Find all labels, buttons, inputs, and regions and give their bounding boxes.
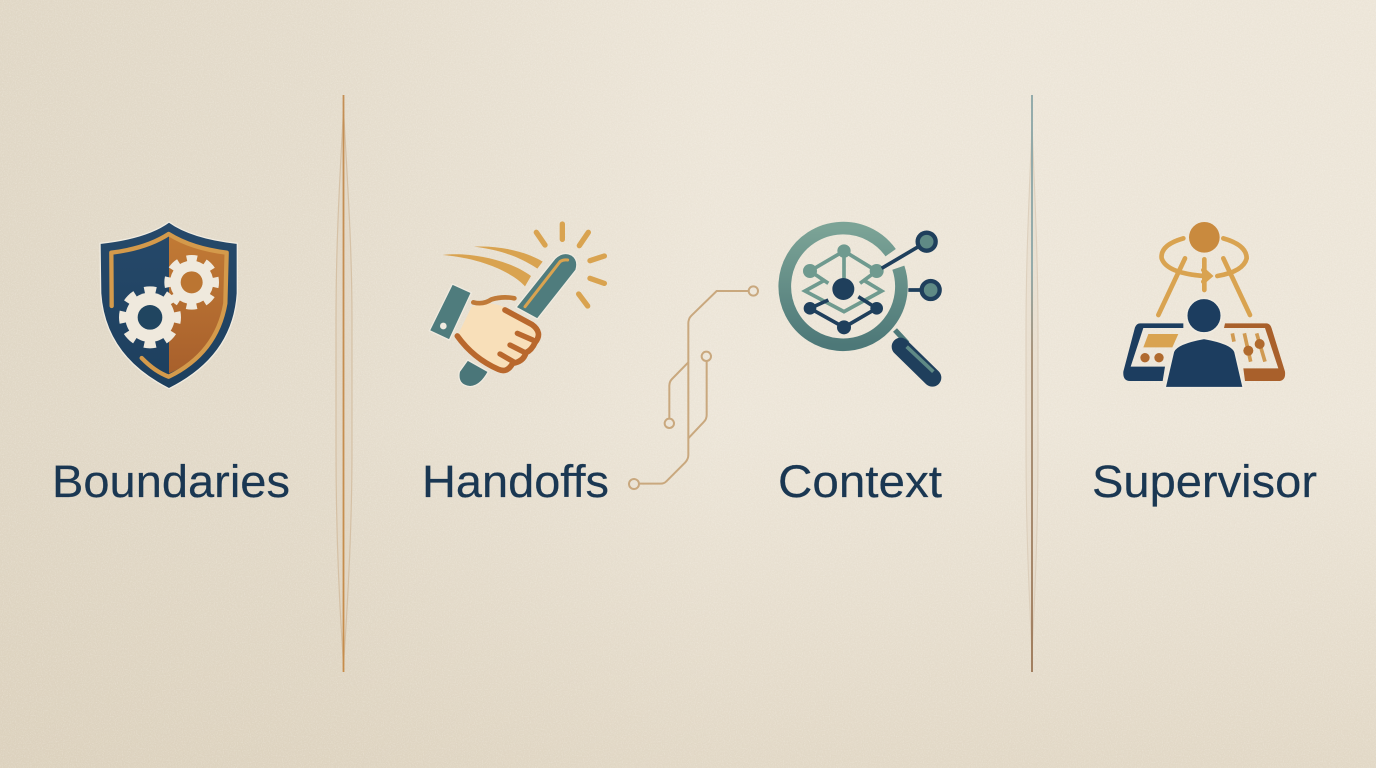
icon: magnifier with network	[785, 228, 940, 378]
panel: Handoffs	[422, 224, 609, 507]
icon: small gear	[168, 259, 215, 306]
label: Handoffs: Handoffs	[422, 456, 609, 507]
label: Context: Context	[778, 456, 943, 507]
label: Supervisor: Supervisor	[1092, 456, 1317, 507]
label: Boundaries: Boundaries	[52, 456, 290, 507]
icon: supervisor at control console	[1123, 222, 1285, 388]
divider: right needle line	[1026, 95, 1038, 672]
panel: Context	[778, 228, 943, 507]
panel: Supervisor	[1092, 222, 1317, 507]
divider: left needle line	[336, 95, 352, 672]
circuit connector between Handoffs and Context	[629, 286, 758, 489]
icon: large gear	[123, 291, 177, 344]
icon: shield with gears	[100, 222, 237, 389]
panel: Boundaries	[52, 222, 290, 507]
icon: hand gripping baton	[429, 224, 604, 387]
